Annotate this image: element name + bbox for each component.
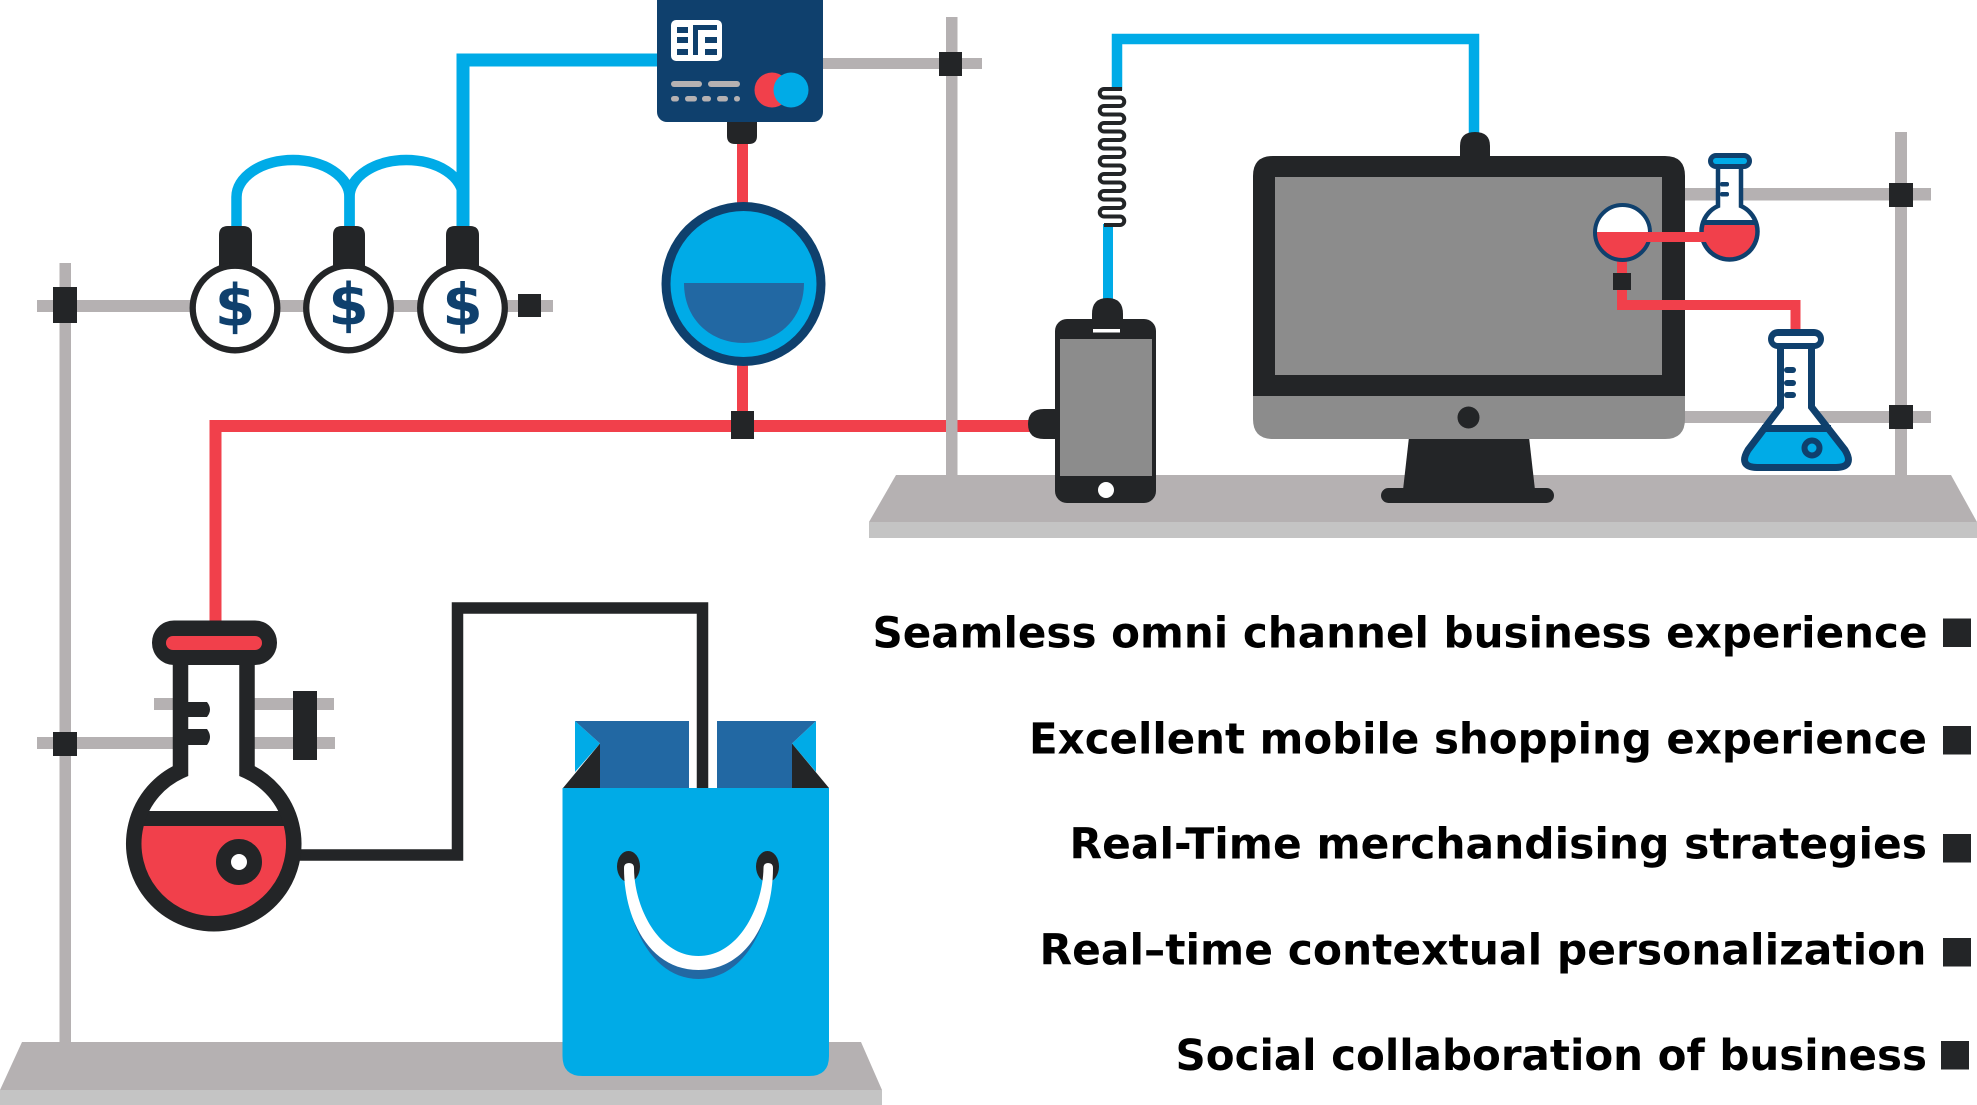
list of business benefits (872, 610, 1971, 1081)
left lab stand base (0, 1042, 882, 1105)
blue tube from coil to phone (1103, 224, 1113, 300)
phone side plug (1028, 409, 1062, 439)
dollar coin bulbs (193, 226, 505, 350)
black tube from flask to bag (296, 608, 702, 855)
card number marks (671, 81, 740, 102)
list item 3: Real-Time merchandising strategies (1070, 820, 1927, 870)
small receiver bulb on monitor (1595, 205, 1650, 260)
desktop monitor (1253, 132, 1685, 503)
coiled cable (1100, 89, 1124, 225)
credit card device (657, 0, 823, 144)
monitor stand (1381, 437, 1554, 503)
small clamp on red tube (1613, 273, 1631, 290)
round meter gauge (662, 202, 826, 366)
bag back flaps (563, 721, 829, 788)
red tube: card through meter to main line (737, 140, 748, 425)
right lab stand base (869, 475, 1977, 538)
monitor top plug (1460, 132, 1490, 160)
red link between receiver bulb and round flask (1640, 232, 1706, 242)
smartphone (1028, 298, 1156, 503)
shopping bag (562, 721, 829, 1076)
coin 3: $ (442, 271, 483, 339)
clamp on red tube (731, 411, 754, 439)
coin 1 (193, 226, 277, 350)
coin 2: $ (328, 270, 369, 338)
bag handle (617, 851, 779, 979)
blue tubes linking coins to card (236, 60, 660, 228)
red tube: phone to flask (216, 426, 1035, 622)
list item 4: Real–time contextual personalization (1040, 926, 1926, 976)
monitor body (1253, 156, 1685, 396)
conical flask with blue liquid (1745, 329, 1848, 468)
card logo circles (754, 72, 808, 108)
card chip (671, 20, 722, 61)
phone top plug (1092, 298, 1123, 322)
small round-bottom flask (1702, 153, 1758, 260)
blue tube from coil to monitor (1117, 39, 1474, 135)
red tube from receiver bulb to conical flask (1622, 260, 1796, 332)
bag body (562, 788, 829, 1076)
left stand rod with clamps (37, 263, 553, 1043)
list item 2: Excellent mobile shopping experience (1029, 716, 1927, 764)
card plug (727, 118, 757, 144)
coin 1: $ (215, 272, 255, 340)
coin 2 (306, 226, 391, 350)
list item 1: Seamless omni channel business experience (872, 610, 1928, 658)
right stand rod with clamps (1680, 132, 1931, 476)
list item 5: Social collaboration of business (1176, 1032, 1927, 1081)
coin 3 (420, 226, 505, 350)
large flask with red liquid (125, 620, 303, 924)
centre stand rod with clamp (823, 17, 982, 475)
